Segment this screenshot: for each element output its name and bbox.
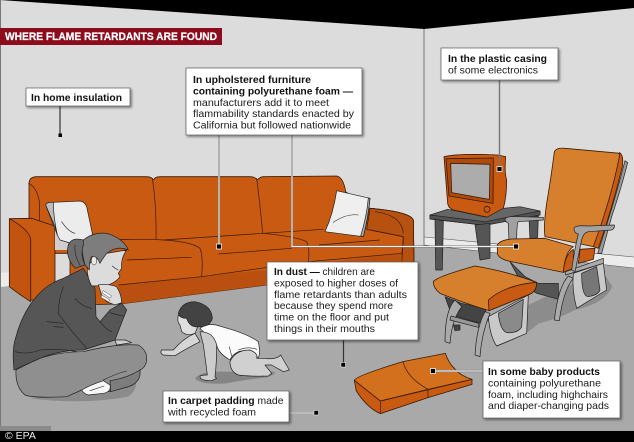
chair armrest bbox=[572, 225, 614, 272]
callout: upholstered furniture bbox=[186, 68, 518, 249]
callout: dust: In dust — children are bbox=[274, 267, 375, 278]
callout: upholstered furniture: manufacturers add it to meet bbox=[193, 98, 329, 109]
woman bbox=[13, 233, 147, 401]
left throw pillow bbox=[46, 201, 93, 250]
title banner: WHERE FLAME RETARDANTS ARE FOUND bbox=[5, 31, 217, 43]
callout: home insulation: In home insulation bbox=[31, 93, 122, 104]
title banner bbox=[0, 28, 222, 45]
callout: dust: exposed to higher doses of bbox=[274, 278, 398, 289]
callout: plastic casing: In the plastic casing bbox=[448, 54, 547, 65]
callout: baby products: and diaper-changing pads bbox=[488, 401, 609, 412]
callout: baby products: foam, including highchairs bbox=[488, 390, 608, 401]
credit: © EPA bbox=[5, 430, 36, 442]
right throw pillow bbox=[325, 191, 370, 237]
callout: carpet padding bbox=[163, 391, 318, 422]
callout: dust: flame retardants than adults bbox=[274, 290, 407, 301]
woman head and hand bbox=[67, 233, 128, 305]
woman body and legs bbox=[13, 268, 147, 401]
baby torso bbox=[200, 325, 259, 360]
callout: upholstered furniture: containing polyurethane foam — bbox=[193, 86, 354, 98]
callout: dust bbox=[267, 262, 418, 367]
baby hair bbox=[178, 302, 212, 327]
baby shadow bbox=[195, 372, 275, 384]
sofa body bbox=[29, 176, 414, 305]
ottoman bbox=[433, 266, 537, 357]
sofa left arm bbox=[9, 183, 55, 302]
sweater bbox=[13, 268, 127, 370]
callout: baby products: containing polyurethane bbox=[488, 378, 601, 389]
chair upper bbox=[505, 148, 628, 253]
television bbox=[444, 154, 507, 217]
callout: carpet padding: with recycled foam bbox=[167, 407, 256, 418]
sofa bbox=[9, 176, 414, 305]
credit bbox=[0, 426, 634, 442]
callout: baby products bbox=[430, 361, 620, 418]
callout: upholstered furniture: flammability standards enacted by bbox=[193, 109, 355, 120]
callout: carpet padding: In carpet padding made bbox=[168, 396, 284, 407]
callout: dust: because they spend more bbox=[274, 301, 393, 312]
side table bbox=[430, 207, 540, 270]
baby leg bbox=[230, 350, 289, 376]
callout: upholstered furniture: California but followed nationwide bbox=[193, 121, 351, 132]
callout: plastic casing bbox=[441, 48, 558, 172]
baby far arm bbox=[161, 333, 200, 356]
baby bbox=[161, 302, 289, 384]
callout: plastic casing: of some electronics bbox=[448, 66, 538, 76]
callout: home insulation bbox=[26, 88, 130, 137]
callout: dust: things in their mouths bbox=[274, 324, 375, 335]
callout: baby products: In some baby products bbox=[488, 367, 600, 378]
baby near arm bbox=[200, 332, 217, 381]
changing pad bbox=[354, 353, 472, 414]
chair lower bbox=[497, 238, 612, 347]
baby face bbox=[178, 315, 198, 335]
glider chair bbox=[497, 148, 628, 347]
callout: upholstered furniture: In upholstered furniture bbox=[193, 75, 311, 86]
callout: dust: time on the floor and put bbox=[274, 313, 389, 324]
